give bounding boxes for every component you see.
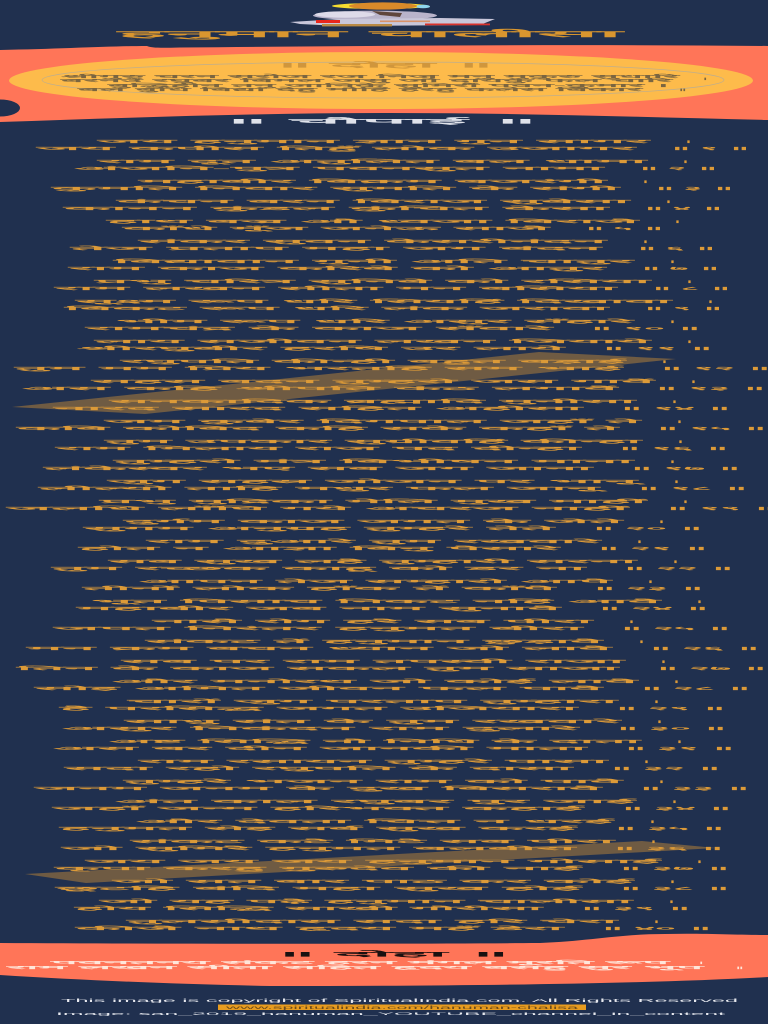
text block: opening doha [52, 73, 707, 93]
text block: chaupai verses: भीम रूप धरि असुर सँहारे [116, 318, 645, 325]
text block: chaupai verses: अंजनि-पुत्र पवनसुत नामा [74, 165, 612, 172]
text block: chaupai verses: ॥ २ ॥ [637, 166, 718, 172]
text block: chaupai verses: और देवता चित्त न धरई [136, 818, 625, 825]
text block: chaupai verses: सब पर राम तपस्वी राजा [110, 658, 633, 665]
text block: chaupai verses: । [671, 559, 678, 564]
text block: chaupai verses: लाय सजीवन लखन जियाये [83, 338, 652, 345]
text block: chaupai verses: जो सुमिरै हनुमत बलबीरा [50, 845, 584, 852]
text block: chaupai verses: । [689, 379, 696, 384]
decorative highlight band upper [12, 352, 676, 414]
text block: chaupai verses: है परसिद्ध जगत उजियारा [48, 705, 586, 712]
text block: closing doha: पवनतनय संकट हरन मंगल मूरति रूप [41, 959, 673, 966]
text block: chaupai verses: नासै रोग हरै सब पीरा [141, 618, 601, 625]
text block: chaupai verses: । [684, 139, 691, 144]
text block: chaupai verses: । [685, 279, 692, 284]
text block: chaupai verses: । [646, 579, 653, 584]
text block: opening doha: ॥ [678, 88, 686, 92]
text block: opening doha: । [702, 77, 707, 81]
text block: chaupai verses: तिन के काज सकल तुम साजा [5, 665, 627, 672]
decorative highlight band lower [25, 841, 716, 883]
text block: chaupai verses: । [695, 859, 702, 864]
text block: chaupai verses: । [668, 259, 675, 264]
text block: chaupai verses: छूटहि बंदि महा सुख होई [43, 885, 594, 892]
text block: chaupai verses: तुम्हरो मंत्र बिभीषन माना [101, 458, 642, 465]
text block: chaupai verses: प्रभु चरित्र सुनिबे को रसिया [83, 278, 659, 285]
text block: chaupai verses: ॥ ३२ ॥ [608, 766, 721, 772]
text block: chaupai verses: चारों जुग परताप तुम्हारा [116, 698, 626, 705]
text block: chaupai verses: काँधे मूँज जनेऊ साजै [111, 225, 554, 232]
text block: chaupai verses: ॥ २० ॥ [590, 526, 703, 532]
text block: closing doha: ॥ [735, 966, 743, 970]
text block: chaupai verses: जो सत बार पाठ कर कोई [101, 878, 645, 885]
text block: chaupai verses: । [676, 439, 683, 444]
text block: chaupai verses: बिकट रूप धरि लंक जरावा [53, 305, 617, 312]
text block: chaupai verses: । [657, 519, 664, 524]
text block: chaupai verses: कबि कोबिद कहि सके कहाँ ते [5, 425, 621, 432]
text block: chaupai verses: अस कहि श्रीपति कंठ लगावैं [22, 385, 630, 392]
text block: chaupai verses: हाथ बज्र औ ध्वजा बिराजै [95, 218, 643, 225]
text block: chaupai verses: ॥ ३८ ॥ [617, 886, 730, 892]
text block: opening doha: बल बुधि बिद्या देहु मोहिं हरहु कलेस बिकार [70, 86, 651, 93]
text block: chaupai verses: ॥ ३९ ॥ [578, 906, 691, 912]
text block: chaupai verses: । [648, 819, 655, 824]
text block: chaupai verses: सदा रहो रघुपति के दासा [53, 765, 581, 772]
text block: chaupai verses: जय कपीस तिहुँ लोक उजागर [25, 145, 647, 152]
text block: chaupai verses: जय हनुमान ज्ञान गुन सागर [86, 139, 662, 145]
text block: chaupai verses: ॥ ९ ॥ [642, 306, 723, 312]
text block: chaupai verses: सुगम अनुग्रह तुम्हरे तेते [72, 525, 557, 532]
text block: chaupai verses: तुलसीदास सदा हरि चेरा [115, 918, 626, 925]
text block: chaupai verses: ॥ १२ ॥ [658, 366, 768, 372]
text block: chaupai verses: । [659, 659, 666, 664]
text block: chaupai verses: । [642, 759, 649, 764]
text block: chaupai verses: राम दुआरे तुम रखवारे [135, 538, 613, 545]
text block: chaupai verses: । [668, 319, 675, 324]
footer: orange link bar: www.spiritualindia.com/hanuman-chalisa [226, 1005, 580, 1010]
text block: chaupai verses: । [675, 419, 682, 424]
text block: chaupai verses: ॥ ३४ ॥ [619, 806, 732, 812]
text block: chaupai verses: ॥ १७ ॥ [628, 466, 741, 472]
text block: chaupai verses: और मनोरथ जो कोई लावै [112, 678, 641, 685]
text block: chaupai verses: । [670, 799, 677, 804]
text block: chaupai verses: । [673, 219, 680, 224]
text block: chaupai verses: । [685, 339, 692, 344]
text block: chaupai verses: ॥ १४ ॥ [618, 406, 731, 412]
text block: chaupai verses: । [660, 359, 667, 364]
text block: chaupai verses: ॥ ३१ ॥ [622, 746, 735, 752]
text block: chaupai verses: कानन कुंडल कुंचित केसा [51, 205, 618, 212]
text block: chaupai verses: ॥ २१ ॥ [595, 546, 708, 552]
text block: opening doha: बुद्धिहीन तनु जानिके सुमिरौं पवन-कुमार । [100, 82, 671, 89]
text block: chaupai verses: ॥ ४ ॥ [642, 206, 723, 212]
text block: chaupai verses: ॥ ७ ॥ [639, 266, 720, 272]
text block: chaupai verses: तुम मम प्रिय भरतहि सम भाई [3, 365, 634, 372]
text block: chaupai verses: बिद्यावान गुनी अति चातुर [102, 258, 646, 265]
text block: chaupai verses: सहस बदन तुम्हरो जस गावैं [80, 378, 666, 385]
text block: chaupai verses: ॥ १९ ॥ [664, 506, 768, 512]
text block: chaupai verses: ॥ १६ ॥ [616, 446, 729, 452]
text block: chaupai verses: जम कुबेर दिगपाल जहाँ ते [93, 418, 643, 425]
text block: chaupai verses: राम काज करिबे को आतुर [57, 265, 618, 272]
text block: chaupai verses: । [675, 739, 682, 744]
text block: chaupai verses: लंकेस्वर भए सब जग जाना [32, 465, 601, 472]
text block: chaupai verses: सनकादिक ब्रह्मादि मुनीसा [98, 398, 644, 405]
text block: chaupai verses: हनुमत सेइ सर्ब सुख करई [48, 825, 588, 832]
text block: chaupai verses: कीजै नाथ हृदय महँ डेरा [64, 925, 572, 932]
text block: chaupai verses: । [668, 459, 675, 464]
text block: chaupai verses: ॥ २३ ॥ [591, 586, 704, 592]
text block: chaupai verses: जहाँ जन्म हरिभक्त कहाई [41, 805, 595, 812]
icon: Hanuman illustration [290, 2, 495, 26]
text block: closing doha [0, 959, 743, 971]
text block: chaupai verses: ॥ ३० ॥ [614, 726, 727, 732]
text block: chaupai verses: श्रीरघुबीर हरषि उर लाये [65, 345, 567, 352]
text block: chaupai verses: महाबीर बिक्रम बजरंगी [127, 178, 615, 185]
text block: chaupai verses: संकट तें हनुमान छुड़ावै [134, 638, 606, 645]
text block: chaupai verses: नारद सारद सहित अहीसा [42, 405, 591, 412]
text block: opening doha: बरनउँ रघुबर बिमल जसु जो दायकु फल चारि [53, 77, 681, 84]
text block: chaupai verses: जपत निरंतर हनुमत बीरा [41, 625, 592, 632]
text block: chaupai verses: तीनों लोक हाँक तें काँपै [71, 585, 558, 592]
footer: copyright line: This image is copyright of SpiritualIndia.com. All Rights Reserved [61, 998, 741, 1003]
text block: chaupai verses: । [652, 699, 659, 704]
text block: chaupai verses: ॥ २२ ॥ [621, 566, 734, 572]
text block: chaupai verses: सोइ अमित जीवन फल पावै [23, 685, 606, 692]
text block: chaupai verses: मन क्रम बचन ध्यान जो लावै [15, 645, 615, 652]
panel: top coral banner [0, 45, 768, 122]
text block: opening doha: श्रीगुरु चरन सरोज रज निज मनु मुकुरु सुधारि [52, 73, 688, 80]
text block: closing doha: । [698, 961, 703, 965]
text block: chaupai verses: । [655, 719, 662, 724]
text block: chaupai verses: । [635, 539, 642, 544]
text block: chaupai verses: ॥ ८ ॥ [650, 286, 731, 292]
text block: chaupai verses: सूक्ष्म रूप धरि सियहिं दिखावा [64, 298, 680, 305]
text block: chaupai verses: ॥ ३ ॥ [653, 186, 734, 192]
text block: chaupai verses: । [652, 919, 659, 924]
text block: chaupai verses: दुर्गम काज जगत के जेते [112, 518, 625, 525]
text block: chaupai verses: जनम जनम के दुख बिसरावै [23, 785, 605, 792]
text block: closing doha: राम लखन सीता सहित हृदय बसहु सुर भूप [0, 964, 707, 971]
text block: chaupai verses: तुम्हरे भजन राम को पावै [112, 778, 626, 785]
text block: chaupai verses: ॥ ३३ ॥ [637, 786, 750, 792]
text block: chaupai verses: आपन तेज सम्हारो आपै [139, 578, 614, 585]
text block: chaupai verses: ॥ ५ ॥ [583, 226, 664, 232]
text block: chaupai verses: । [672, 479, 679, 484]
text block: chaupai verses: अस बर दीन जानकी माता [53, 745, 595, 752]
text block: chaupai verses: महाबीर जब नाम सुनावै [65, 605, 564, 612]
text block: chaupai verses: राम मिलाय राज पद दीन्हा [44, 445, 589, 452]
text block: chaupai verses: राम दूत अतुलित बल धामा [86, 158, 655, 165]
heading: closing doha: ॥ दोहा ॥ [273, 950, 509, 958]
text block: chaupai verses: अंत काल रघुबर पुर जाई [115, 798, 648, 805]
title: हनुमान चालीसा [108, 28, 629, 40]
text block: chaupai verses: ॥ १ ॥ [669, 146, 750, 152]
text block: chaupai verses: तुम रच्छक काहू को डर ना [40, 565, 594, 572]
text block: chaupai verses: तेज प्रताप महा जग बंदन [58, 245, 605, 252]
text block: chaupai verses: तुम उपकार सुग्रीवहिं कीन्हा [93, 438, 650, 445]
text block: chaupai verses: ॥ १० ॥ [588, 326, 701, 332]
text block: chaupai verses: जलधि लाँघि गये अचरज नाहीं [0, 505, 637, 512]
text block: chaupai verses: । [657, 779, 664, 784]
text block: chaupai verses: ॥ २८ ॥ [638, 686, 751, 692]
footer: image credit line: Image: san_2019_hanuman_YOUTUBE_channel_in_content [56, 1011, 730, 1016]
footer: orange link bar [218, 1004, 586, 1010]
text block: chaupai verses: होत न आज्ञा बिनु पैसारे [67, 545, 571, 552]
text block: chaupai verses: ॥ ३६ ॥ [611, 846, 724, 852]
text block: chaupai verses: ॥ २५ ॥ [618, 626, 731, 632]
text block: chaupai verses: । [649, 839, 656, 844]
text block: chaupai verses: । [667, 899, 674, 904]
text block: chaupai verses: ॥ ११ ॥ [600, 346, 713, 352]
text block: chaupai verses: साधु संत के तुम रखवारे [113, 718, 633, 725]
text block: chaupai verses: ॥ २४ ॥ [596, 606, 709, 612]
text block: chaupai verses: संकट कटै मिटै सब पीरा [119, 838, 623, 845]
text block: chaupai verses: ॥ २९ ॥ [613, 706, 726, 712]
text block: chaupai verses: ॥ ३५ ॥ [612, 826, 725, 832]
text block: chaupai verses: ॥ ६ ॥ [635, 246, 716, 252]
text block: chaupai verses: । [664, 199, 671, 204]
text block: chaupai verses: राम लखन सीता मन बसिया [43, 285, 625, 292]
text block: chaupai verses: ॥ १३ ॥ [653, 386, 766, 392]
text block: chaupai verses: कृपा करहु गुरुदेव की नाईं [43, 865, 593, 872]
text block: chaupai verses: ॥ १८ ॥ [635, 486, 748, 492]
text block: chaupai verses [0, 139, 768, 932]
text block: chaupai verses: ॥ २६ ॥ [647, 646, 760, 652]
text block: chaupai verses: रघुपति कीन्ही बहुत बड़ाई [109, 358, 637, 365]
text block: chaupai verses: कंचन बरन बिराज सुबेसा [105, 198, 638, 205]
text block: chaupai verses: ॥ ३७ ॥ [617, 866, 730, 872]
text block: chaupai verses: । [641, 179, 648, 184]
text block: chaupai verses: भूत पिसाच निकट नहिं आवै [91, 598, 664, 605]
text block: chaupai verses: राम रसायन तुम्हरे पासा [127, 758, 616, 765]
text block: chaupai verses: लील्यो ताहि मधुर फल जानू [27, 485, 611, 492]
text block: chaupai verses: । [668, 879, 675, 884]
text block: chaupai verses: सब सुख लहै तुम्हारी सरना [97, 558, 645, 565]
heading: doha: ॥ दोहा ॥ [272, 60, 493, 70]
text block: chaupai verses: । [681, 499, 688, 504]
panel: bottom coral banner [0, 934, 768, 986]
text block: chaupai verses: । [706, 299, 713, 304]
text block: chaupai verses: जो यह पढ़ै हनुमान चालीसा [88, 898, 641, 905]
text block: chaupai verses: प्रभु मुद्रिका मेलि मुख माहीं [88, 498, 655, 505]
text block: chaupai verses: संकर सुवन केसरीनंदन [127, 238, 610, 245]
text block: chaupai verses: । [672, 679, 679, 684]
text block: chaupai verses: । [637, 639, 644, 644]
text block: chaupai verses: । [670, 399, 677, 404]
text block: chaupai verses: असुर निकंदन राम दुलारे [62, 725, 591, 732]
text block: chaupai verses: ॥ २७ ॥ [654, 666, 767, 672]
text block: chaupai verses: । [681, 159, 688, 164]
text block: chaupai verses: जय जय जय हनुमान गोसाईं [74, 858, 672, 865]
text block: chaupai verses: जुग सहस्र जोजन पर भानू [96, 478, 649, 485]
text block: chaupai verses: रामचंद्र के काज सँवारे [73, 325, 565, 332]
text block: chaupai verses: अष्ट सिद्धि नौ निधि के दाता [109, 738, 649, 745]
text block: chaupai verses: कुमति निवार सुमति के संगी [40, 185, 628, 192]
text block: chaupai verses: ॥ ४० ॥ [599, 926, 712, 932]
text block: chaupai verses: ॥ १५ ॥ [654, 426, 767, 432]
text block: chaupai verses: । [695, 599, 702, 604]
text block: chaupai verses: । [641, 239, 648, 244]
heading: chaupai: ॥ चौपाई ॥ [220, 116, 537, 126]
text block: chaupai verses: होय सिद्धि साखी गौरीसा [64, 905, 550, 912]
text block: chaupai verses: । [627, 619, 634, 624]
